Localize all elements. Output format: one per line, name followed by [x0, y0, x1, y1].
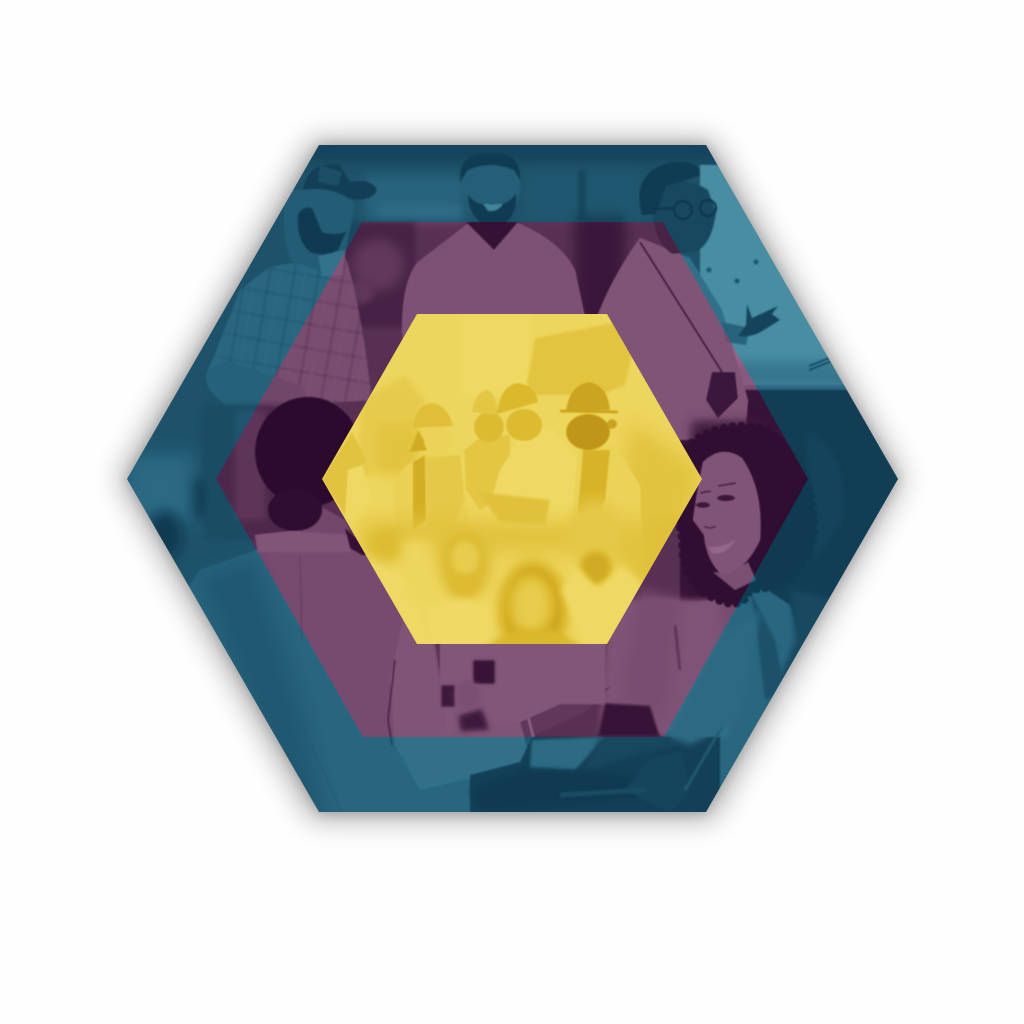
worker: man three [493, 456, 511, 496]
hexagon montage graphic [107, 124, 915, 836]
drop shadow [118, 140, 904, 820]
foreground woman face [322, 432, 366, 515]
worker: woman with vest [394, 456, 466, 511]
worker: man four [576, 460, 641, 526]
outer teal hexagon photo [110, 130, 920, 830]
blurred foreground people [360, 520, 650, 554]
middle purple hexagon photo [216, 222, 808, 737]
worker: man two [464, 435, 510, 510]
inner yellow hexagon photo [322, 314, 702, 644]
